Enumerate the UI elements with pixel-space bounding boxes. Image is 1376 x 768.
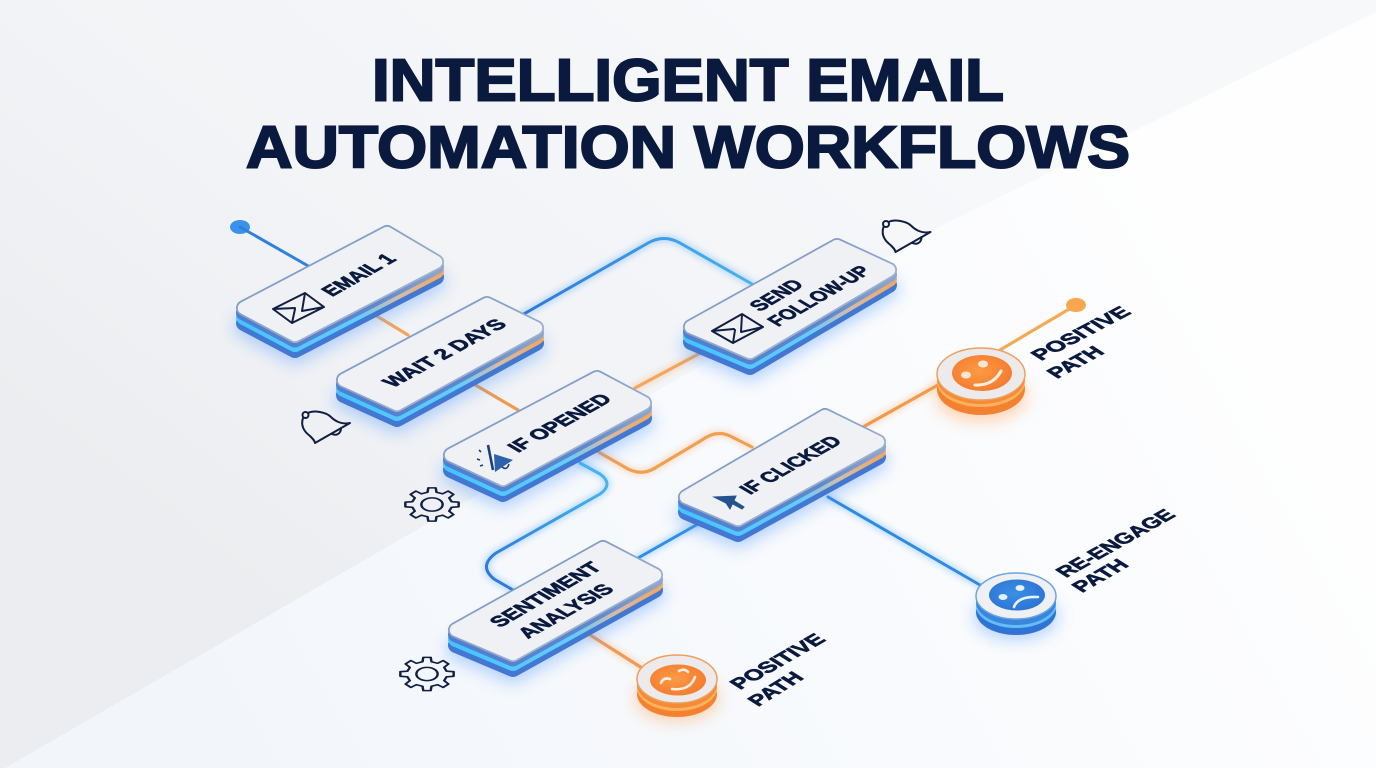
icon: smile button, positive path bottom bbox=[635, 655, 719, 722]
card: If Opened bbox=[451, 378, 644, 498]
label: positive path bottom: POSITIVE bbox=[725, 631, 831, 693]
connector: Wait 2 Days to Send Follow-Up bbox=[522, 238, 752, 315]
label: positive path right bbox=[1026, 304, 1136, 382]
icon: frown button, re-engage path bbox=[974, 573, 1058, 640]
title: AUTOMATION WORKFLOWS bbox=[246, 114, 1130, 180]
label: positive path right: POSITIVE bbox=[1026, 304, 1136, 364]
label: Sentiment Analysis: SENTIMENT bbox=[485, 559, 607, 631]
title bbox=[246, 48, 1130, 180]
icon: gear middle bbox=[405, 488, 459, 521]
icon: gear bottom bbox=[400, 657, 454, 691]
icon: envelope bbox=[273, 293, 324, 323]
icon: bell left bbox=[302, 412, 350, 443]
connector: Wait 2 Days to If Opened bbox=[472, 383, 518, 410]
connector: If Opened to Send Follow-Up bbox=[635, 350, 706, 388]
label: Email 1: EMAIL 1 bbox=[317, 251, 401, 300]
card: If Clicked bbox=[686, 416, 878, 538]
label: Send Follow-Up: FOLLOW-UP bbox=[763, 263, 876, 330]
label: If Clicked: IF CLICKED bbox=[735, 433, 847, 498]
label: Send Follow-Up bbox=[745, 263, 876, 330]
connector: Email 1 to Wait 2 Days bbox=[370, 312, 408, 335]
label: positive path right: PATH bbox=[1042, 343, 1110, 382]
label: re-engage path: RE-ENGAGE bbox=[1051, 506, 1181, 581]
label: positive path bottom: PATH bbox=[743, 669, 809, 710]
connector: If Opened to If Clicked bbox=[595, 433, 752, 472]
connector: If Clicked to positive path bbox=[863, 385, 938, 427]
icon: envelope bbox=[712, 314, 763, 343]
icon: ringing bell bbox=[477, 445, 513, 472]
title: INTELLIGENT EMAIL bbox=[372, 48, 1004, 114]
label: If Opened: IF OPENED bbox=[503, 391, 617, 456]
card: Wait 2 Days bbox=[344, 304, 536, 423]
connector: start dot to Email 1 bbox=[230, 220, 310, 267]
label: re-engage path: PATH bbox=[1067, 556, 1134, 596]
label: Wait 2 Days: WAIT 2 DAYS bbox=[378, 316, 512, 391]
label: Sentiment Analysis: ANALYSIS bbox=[513, 581, 619, 642]
card: Email 1 bbox=[244, 233, 436, 354]
connector glow bbox=[486, 238, 980, 668]
icon: cursor bbox=[714, 496, 744, 509]
connector: If Opened to Sentiment Analysis bbox=[486, 463, 607, 590]
icon: smile button, positive path right bbox=[935, 348, 1027, 422]
connector: Sentiment Analysis to If Clicked bbox=[638, 520, 705, 558]
label: Send Follow-Up: SEND bbox=[745, 276, 809, 315]
card: Sentiment Analysis bbox=[456, 548, 655, 673]
connector: Sentiment Analysis to positive path bbox=[587, 633, 642, 668]
icon: bell top right bbox=[883, 221, 930, 252]
connector: positive path to end dot bbox=[1000, 298, 1086, 350]
connector: If Clicked to re-engage path bbox=[828, 497, 980, 585]
card: Send Follow-Up bbox=[691, 246, 889, 371]
